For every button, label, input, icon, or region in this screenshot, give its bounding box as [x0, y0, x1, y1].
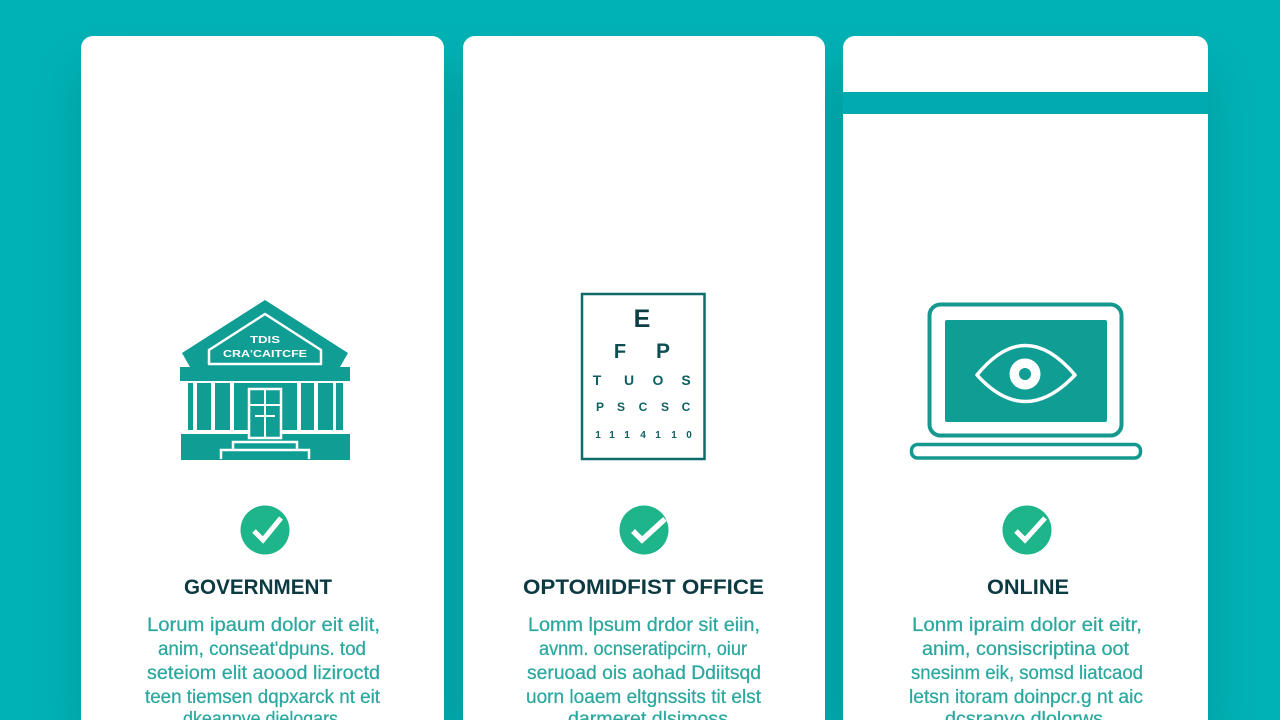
body text: online: anim, consiscriptina oot: [922, 639, 1130, 660]
body text: government: seteiom elit aoood liziroctd: [147, 663, 380, 684]
icon: eye chart: C: [682, 400, 691, 414]
icon: eye chart: 4: [640, 430, 646, 441]
icon: check badge: [620, 506, 668, 554]
body text: online: Lonm ipraim dolor eit eitr,: [912, 615, 1142, 636]
body text: optometrist office: avnm. ocnseratipcirn, oiur: [539, 639, 748, 660]
card background: [843, 114, 1208, 720]
icon: eye chart: P: [656, 340, 670, 363]
icon: eye chart: 1: [595, 430, 601, 441]
body text: government: [145, 615, 381, 720]
icon: eye chart: P: [596, 400, 604, 414]
card background: [463, 36, 825, 720]
body text: optometrist office: [526, 615, 762, 720]
icon: laptop with eye: [912, 304, 1140, 458]
panel: government: [81, 36, 444, 720]
body text: optometrist office: Lomm lpsum drdor sit eiin,: [528, 615, 760, 636]
heading: government: GOVERNMENT: [184, 576, 332, 599]
icon: eye chart: S: [681, 372, 691, 388]
icon: eye chart: C: [639, 400, 648, 414]
icon: check badge: [240, 506, 290, 554]
body text: online: [909, 615, 1143, 720]
icon: eye chart: 1: [671, 430, 677, 441]
body text: government: anim, conseat'dpuns. tod: [158, 639, 366, 660]
heading: optometrist office: OPTOMIDFIST OFFICE: [523, 576, 764, 599]
icon: eye chart: 0: [686, 430, 692, 441]
icon: eye chart: [582, 294, 704, 459]
icon: eye chart: 1: [624, 430, 630, 441]
icon: eye chart: O: [653, 372, 664, 388]
icon: check badge: [1002, 506, 1052, 554]
panel: online top strip: [843, 36, 1208, 92]
panel: online: [843, 114, 1208, 720]
panel: optometrist office: [463, 36, 825, 720]
icon: government building: [180, 300, 350, 460]
heading: online: ONLINE: [987, 576, 1069, 599]
icon: eye chart: 1: [655, 430, 661, 441]
icon: eye chart: E: [634, 305, 650, 333]
body text: optometrist office: seruoad ois aohad Ddiitsqd: [527, 663, 761, 684]
icon: government building: CRA'CAITCFE: [223, 349, 307, 360]
body text: online: letsn itoram doinpcr.g nt aic: [909, 687, 1143, 708]
icon: eye chart: S: [617, 400, 625, 414]
body text: optometrist office: uorn loaem eltgnssits tit elst: [526, 687, 762, 708]
icon: eye chart: S: [661, 400, 669, 414]
body text: government: teen tiemsen dqpxarck nt eit: [145, 687, 381, 708]
card background: [81, 36, 444, 720]
body text: online: snesinm eik, somsd liatcaod: [911, 663, 1143, 684]
icon: eye chart: F: [614, 341, 626, 363]
icon: government building: TDIS: [250, 335, 280, 346]
icon: eye chart: T: [593, 372, 602, 388]
icon: eye chart: U: [624, 372, 634, 388]
body text: government: Lorum ipaum dolor eit elit,: [147, 615, 380, 636]
icon: eye chart: 1: [609, 430, 615, 441]
